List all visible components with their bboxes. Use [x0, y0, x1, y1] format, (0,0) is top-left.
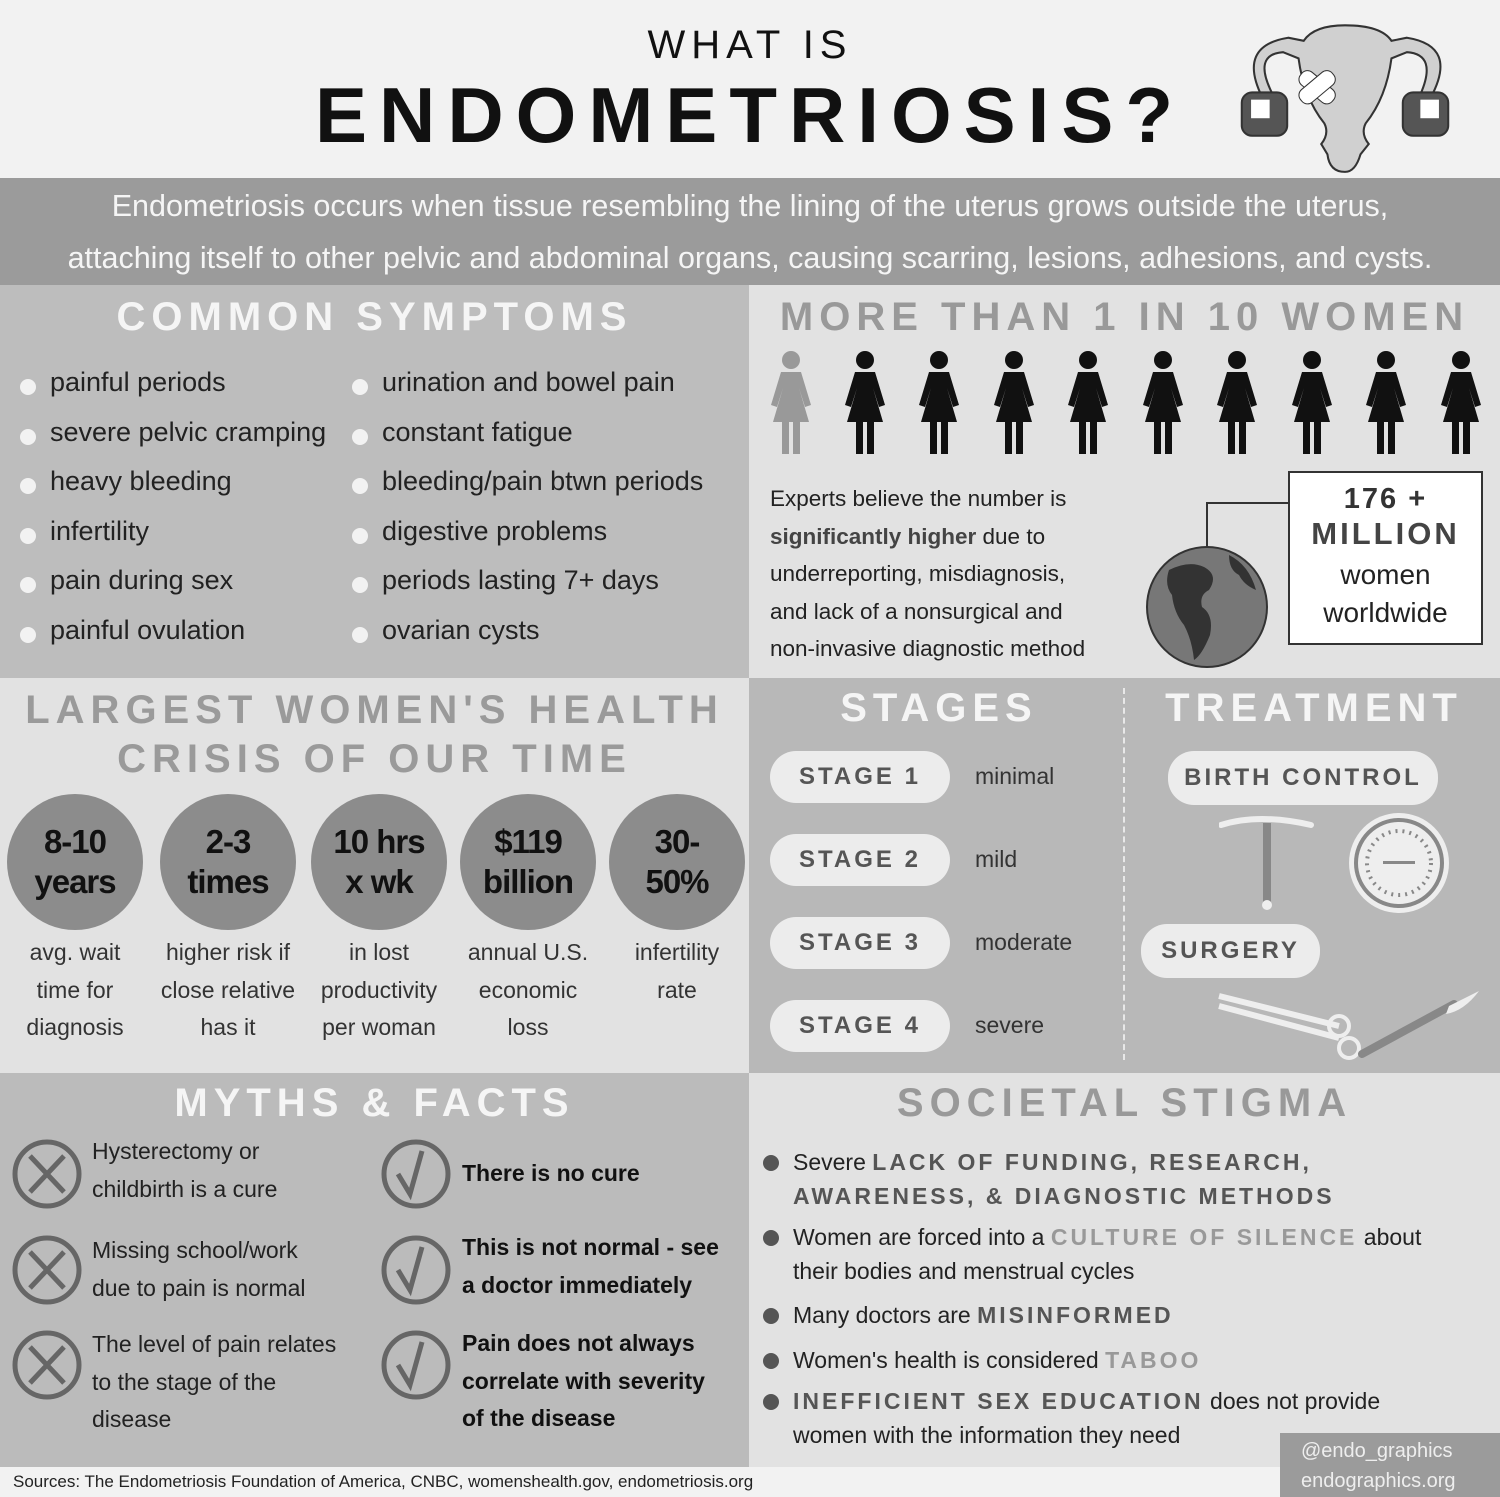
- fact 3: [462, 1330, 705, 1431]
- stage 2: [770, 834, 950, 886]
- fact 2: This is not normal - see: [462, 1234, 719, 1260]
- caption 1: [26, 939, 124, 1040]
- text: experts believe: significantly higher due to: [770, 524, 1045, 548]
- symptom list right: bleeding/pain btwn periods: [382, 466, 703, 496]
- symptom list right: digestive problems: [382, 516, 607, 546]
- caption 3: in lost: [349, 939, 409, 965]
- heading: CRISIS OF OUR TIME: [117, 737, 632, 781]
- icons: x marks: [12, 1140, 82, 1400]
- stage 4: STAGE 4: [799, 1012, 921, 1039]
- text: experts believe: underreporting, misdiagnosis,: [770, 561, 1065, 586]
- title: ENDOMETRIOSIS?: [315, 71, 1185, 159]
- panel: myths & facts: [0, 1073, 749, 1467]
- symptom list right: urination and bowel pain: [382, 367, 675, 397]
- symptom list right: [352, 367, 703, 644]
- stat: $119 billion: billion: [483, 863, 573, 900]
- panel: health crisis: [0, 678, 749, 1073]
- stage 1: STAGE 1: [799, 763, 921, 790]
- title: WHAT IS: [648, 23, 852, 67]
- heading: MORE THAN 1 IN 10 WOMEN: [780, 295, 1469, 339]
- callout: 176 million: women: [1340, 559, 1431, 590]
- panel: stages & treatment: moderate: [975, 929, 1072, 955]
- panel: stages & treatment: [749, 678, 1500, 1073]
- stage 4: [770, 1000, 950, 1052]
- bullet 1: AWARENESS, & DIAGNOSTIC METHODS: [793, 1183, 1335, 1209]
- bullet 5: women with the information they need: [793, 1422, 1180, 1448]
- myth 2: [92, 1237, 306, 1301]
- credit box: endographics.org: [1301, 1470, 1456, 1492]
- panel: stages & treatment: mild: [975, 846, 1017, 872]
- symptom list right: constant fatigue: [382, 416, 573, 446]
- fact 2: [462, 1234, 719, 1298]
- symptom list left: painful periods: [50, 367, 226, 397]
- stage 3: [770, 917, 950, 969]
- callout: 176 million: worldwide: [1323, 597, 1448, 628]
- stat: 10 hrs: 10 hrs: [333, 823, 425, 860]
- stat: 8-10 years: 8-10: [44, 823, 106, 860]
- myth 2: due to pain is normal: [92, 1274, 306, 1300]
- pill: surgery: [1141, 924, 1320, 978]
- panel: stages & treatment: severe: [975, 1012, 1044, 1038]
- icons: check marks: [382, 1140, 450, 1400]
- caption 2: has it: [200, 1014, 255, 1040]
- credit box: @endo_graphics: [1301, 1440, 1453, 1462]
- heading: treatment: TREATMENT: [1165, 686, 1463, 730]
- bullet 1: [763, 1145, 1463, 1213]
- credit box: [1280, 1433, 1500, 1497]
- fact 1: There is no cure: [462, 1160, 640, 1186]
- caption 3: productivity: [321, 976, 437, 1002]
- caption 2: higher risk if: [166, 939, 290, 965]
- heading: MYTHS & FACTS: [174, 1081, 575, 1125]
- symptom list right: periods lasting 7+ days: [382, 565, 659, 595]
- myth 3: to the stage of the: [92, 1368, 276, 1394]
- caption 4: loss: [508, 1014, 548, 1040]
- bullet 4: Women's health is considered TABOO: [793, 1347, 1201, 1373]
- heading: stages: STAGES: [840, 686, 1038, 730]
- stage 3: STAGE 3: [799, 929, 921, 956]
- stat: 30-50%: [609, 794, 745, 930]
- icon: uterus: [1240, 24, 1450, 173]
- caption 5: infertility: [635, 939, 719, 965]
- myth 3: The level of pain relates: [92, 1331, 336, 1357]
- callout: 176 million: 176 +: [1344, 483, 1427, 515]
- caption 4: economic: [479, 976, 577, 1002]
- stage 2: STAGE 2: [799, 846, 921, 873]
- panel: 1 in 10 women: [749, 285, 1500, 678]
- fact 3: of the disease: [462, 1405, 615, 1431]
- stat: 2-3 times: [160, 794, 296, 930]
- stat: 2-3 times: times: [187, 863, 269, 900]
- stat: 30-50%: 30-: [655, 823, 699, 860]
- stat: $119 billion: $119: [494, 823, 562, 860]
- myth 2: Missing school/work: [92, 1237, 298, 1263]
- myth 3: [92, 1331, 336, 1432]
- panel: symptoms: [0, 285, 749, 678]
- text: experts believe: [770, 486, 1085, 661]
- symptom list left: infertility: [50, 516, 149, 546]
- footer: sources: Sources: The Endometriosis Foundation of America, CNBC, womenshealth.gov, endometriosis.org: [13, 1472, 753, 1491]
- footer: sources: [0, 1467, 1280, 1497]
- caption 3: per woman: [322, 1014, 436, 1040]
- definition band: attaching itself to other pelvic and abdominal organs, causing scarring, lesions, adhesions, and cysts.: [68, 241, 1432, 275]
- bullet 2: [763, 1220, 1483, 1288]
- bullet 1: Severe LACK OF FUNDING, RESEARCH,: [793, 1149, 1312, 1175]
- text: experts believe: Experts believe the number is: [770, 486, 1066, 511]
- bullet 2: Women are forced into a CULTURE OF SILENCE about: [793, 1224, 1421, 1250]
- stat: 8-10 years: years: [34, 863, 116, 900]
- symptom list left: painful ovulation: [50, 614, 245, 644]
- stat: 10 hrs: [311, 794, 447, 930]
- stat: 30-50%: 50%: [645, 863, 709, 900]
- symptom list left: heavy bleeding: [50, 466, 232, 496]
- pill: birth control: [1168, 751, 1438, 805]
- caption 3: [321, 939, 437, 1040]
- caption 4: annual U.S.: [468, 939, 588, 965]
- stage 1: [770, 751, 950, 803]
- icon: globe: [1146, 502, 1288, 668]
- fact 2: a doctor immediately: [462, 1272, 692, 1298]
- stat: 8-10 years: [7, 794, 143, 930]
- caption 1: diagnosis: [26, 1014, 124, 1040]
- caption 5: [635, 939, 719, 1002]
- bullet 3: Many doctors are MISINFORMED: [793, 1302, 1174, 1328]
- title: [315, 23, 1185, 159]
- pill: birth control: BIRTH CONTROL: [1184, 764, 1422, 791]
- panel: stages & treatment: minimal: [975, 763, 1054, 789]
- symptom list left: [20, 367, 326, 644]
- caption 5: rate: [657, 976, 697, 1002]
- stat: 2-3 times: 2-3: [206, 823, 250, 860]
- heading: common symptoms: COMMON SYMPTOMS: [117, 295, 632, 339]
- myth 1: childbirth is a cure: [92, 1176, 277, 1202]
- bullet 5: [763, 1384, 1463, 1452]
- symptom list left: severe pelvic cramping: [50, 416, 326, 446]
- caption 1: avg. wait: [30, 939, 120, 965]
- heading: LARGEST WOMEN'S HEALTH: [25, 688, 724, 732]
- callout: 176 million: MILLION: [1311, 516, 1460, 551]
- text: experts believe: non-invasive diagnostic method: [770, 636, 1085, 661]
- callout: 176 million: [1288, 471, 1483, 645]
- stat: $119 billion: [460, 794, 596, 930]
- fact 3: correlate with severity: [462, 1368, 705, 1394]
- definition band: [0, 178, 1500, 285]
- bullet 5: INEFFICIENT SEX EDUCATION does not provide: [793, 1388, 1380, 1414]
- fact 3: Pain does not always: [462, 1330, 695, 1356]
- caption 2: close relative: [161, 976, 295, 1002]
- caption 4: [468, 939, 588, 1040]
- caption 2: [161, 939, 295, 1040]
- stat: 10 hrs: x wk: [345, 863, 413, 900]
- bullet 2: their bodies and menstrual cycles: [793, 1258, 1134, 1284]
- myth 1: [92, 1138, 277, 1202]
- myth 3: disease: [92, 1406, 171, 1432]
- icon: IUD and pill pack: [1219, 813, 1449, 913]
- icon: women figures: [771, 351, 1481, 454]
- icon: scissors and scalpel: [1218, 991, 1479, 1060]
- heading: [25, 688, 724, 781]
- symptom list right: ovarian cysts: [382, 614, 540, 644]
- symptom list left: pain during sex: [50, 565, 233, 595]
- panel: societal stigma: [749, 1073, 1500, 1497]
- heading: SOCIETAL STIGMA: [897, 1081, 1352, 1125]
- pill: surgery: SURGERY: [1161, 937, 1300, 964]
- definition band: Endometriosis occurs when tissue resembling the lining of the uterus grows outside the uterus,: [112, 189, 1388, 223]
- caption 1: time for: [37, 976, 113, 1002]
- text: experts believe: and lack of a nonsurgical and: [770, 598, 1063, 624]
- myth 1: Hysterectomy or: [92, 1138, 259, 1164]
